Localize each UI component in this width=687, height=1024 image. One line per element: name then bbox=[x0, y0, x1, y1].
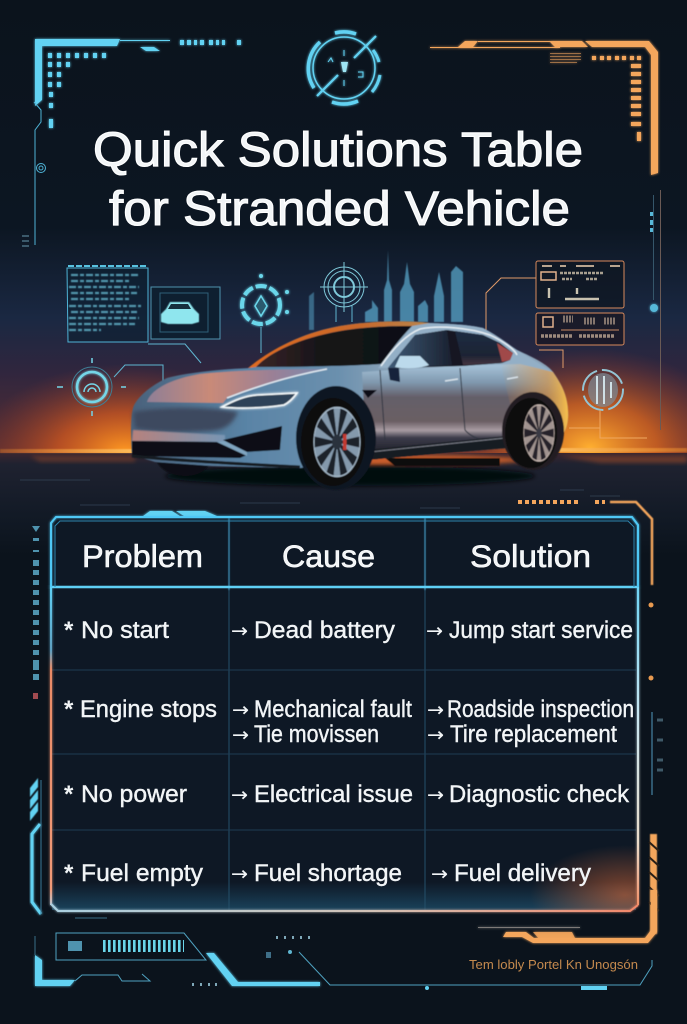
table row: fuel empty: Fuel delivery bbox=[454, 860, 591, 887]
table row: engine stops: Mechanical fault bbox=[254, 696, 412, 723]
car: rear glow bbox=[500, 358, 568, 445]
frame: left rail bbox=[22, 102, 46, 246]
car: side intake bbox=[223, 426, 282, 452]
title bbox=[93, 123, 583, 236]
frame: top left corner bbox=[35, 39, 241, 128]
table row: fuel empty bbox=[64, 860, 591, 887]
table row: fuel empty: Fuel empty bbox=[81, 860, 203, 887]
car: door seams bbox=[380, 368, 490, 442]
car: badge bbox=[362, 390, 377, 398]
icon: left gauge bbox=[57, 358, 126, 416]
table row: engine stops: → bbox=[232, 699, 249, 721]
car: ground shadow bbox=[165, 466, 535, 486]
footer text: Tem lobly Portel Kn Unogsón bbox=[469, 957, 638, 972]
table row: engine stops bbox=[64, 696, 634, 748]
car: rear side window bbox=[455, 331, 502, 365]
car: quarter window bbox=[497, 343, 513, 362]
table row: engine stops: → bbox=[232, 724, 249, 746]
table: header divider bbox=[51, 586, 637, 588]
table row: no power: → bbox=[231, 784, 248, 806]
car: mirror bbox=[388, 368, 400, 382]
table header: Cause bbox=[282, 538, 375, 574]
table row: no start: Dead battery bbox=[254, 617, 395, 644]
car: roof orange band bbox=[248, 321, 430, 368]
table row: no start: * bbox=[64, 617, 74, 644]
table row: fuel empty: → bbox=[431, 863, 448, 885]
table row: engine stops: Tie movissen bbox=[254, 721, 379, 748]
icon: circular emblem bbox=[308, 32, 380, 104]
car: far front wheel bbox=[155, 458, 212, 476]
table row: engine stops: → bbox=[427, 699, 444, 721]
car: front wheel bbox=[296, 386, 376, 490]
table left hud strip bbox=[30, 526, 41, 914]
hud: connector lines bbox=[114, 278, 563, 381]
table row: no power: No power bbox=[81, 781, 187, 808]
hud: right data panel bottom bbox=[536, 313, 624, 345]
car: front lip bbox=[132, 456, 300, 467]
table row: no start: Jump start service bbox=[449, 617, 633, 644]
hud: city skyline bbox=[309, 250, 463, 330]
hud: car panel bbox=[151, 287, 220, 339]
frame: bottom left bbox=[35, 918, 320, 986]
title: Quick Solutions Table bbox=[93, 123, 583, 177]
icon: right gauge bbox=[583, 370, 623, 410]
table header: Problem bbox=[82, 538, 203, 574]
table row: engine stops: * bbox=[64, 696, 74, 723]
table row: fuel empty: * bbox=[64, 860, 74, 887]
car: rear far tyre bbox=[385, 458, 500, 466]
frame: bottom line bbox=[192, 936, 652, 990]
icon: gear dial bbox=[242, 274, 288, 324]
car: ground reflection bbox=[185, 454, 525, 466]
table row: no start: No start bbox=[81, 617, 169, 644]
frame: right rail bbox=[650, 190, 661, 430]
table row: no power: → bbox=[427, 784, 444, 806]
car: grille band bbox=[133, 408, 238, 432]
car: side panels bbox=[362, 362, 568, 460]
table: outer border bbox=[50, 517, 639, 911]
car: roof silver bbox=[378, 323, 553, 372]
car: light band bbox=[132, 430, 225, 442]
car: front side window bbox=[388, 330, 452, 368]
car: lower sill bbox=[367, 436, 507, 460]
car bbox=[131, 321, 568, 490]
title: for Stranded Vehicle bbox=[109, 182, 570, 236]
table row: no power: Electrical issue bbox=[254, 781, 413, 808]
car: window frame bbox=[381, 327, 517, 366]
table row: no power: Diagnostic check bbox=[449, 781, 630, 808]
table: panel bbox=[48, 510, 642, 914]
orange side lines bbox=[569, 410, 647, 438]
table: top tab bbox=[143, 511, 217, 516]
car: lower intake bbox=[132, 441, 247, 458]
frame: top right corner bbox=[430, 41, 658, 175]
frame: bottom right corner bbox=[478, 890, 657, 943]
table row: fuel empty: Fuel shortage bbox=[254, 860, 402, 887]
table row: engine stops: Engine stops bbox=[80, 696, 217, 723]
table right hud strip bbox=[518, 502, 663, 934]
table header bbox=[82, 538, 591, 574]
car: rear wheel bbox=[502, 392, 564, 470]
car: body shell bbox=[131, 321, 568, 468]
table row: engine stops: → bbox=[427, 724, 444, 746]
car: hood bbox=[147, 369, 327, 403]
table row: engine stops: Roadside inspection bbox=[447, 696, 634, 723]
table row: no start bbox=[64, 617, 633, 644]
table row: no power: * bbox=[64, 781, 74, 808]
car: windshield bbox=[256, 326, 412, 367]
table: grid lines bbox=[229, 520, 425, 911]
car: side window backing bbox=[388, 330, 513, 368]
table header: Solution bbox=[470, 538, 591, 574]
table row: fuel empty: → bbox=[231, 863, 248, 885]
car: headlight bbox=[222, 393, 297, 408]
table row: engine stops: Tire replacement bbox=[450, 721, 617, 748]
car: chrome blade bbox=[217, 441, 247, 456]
table row: no power bbox=[64, 781, 630, 808]
hud: text panel bbox=[67, 266, 148, 342]
table row: no start: → bbox=[426, 620, 443, 642]
table row: no start: → bbox=[231, 620, 248, 642]
icon: target dial bbox=[320, 262, 368, 312]
hud: right data panel top bbox=[536, 261, 624, 308]
